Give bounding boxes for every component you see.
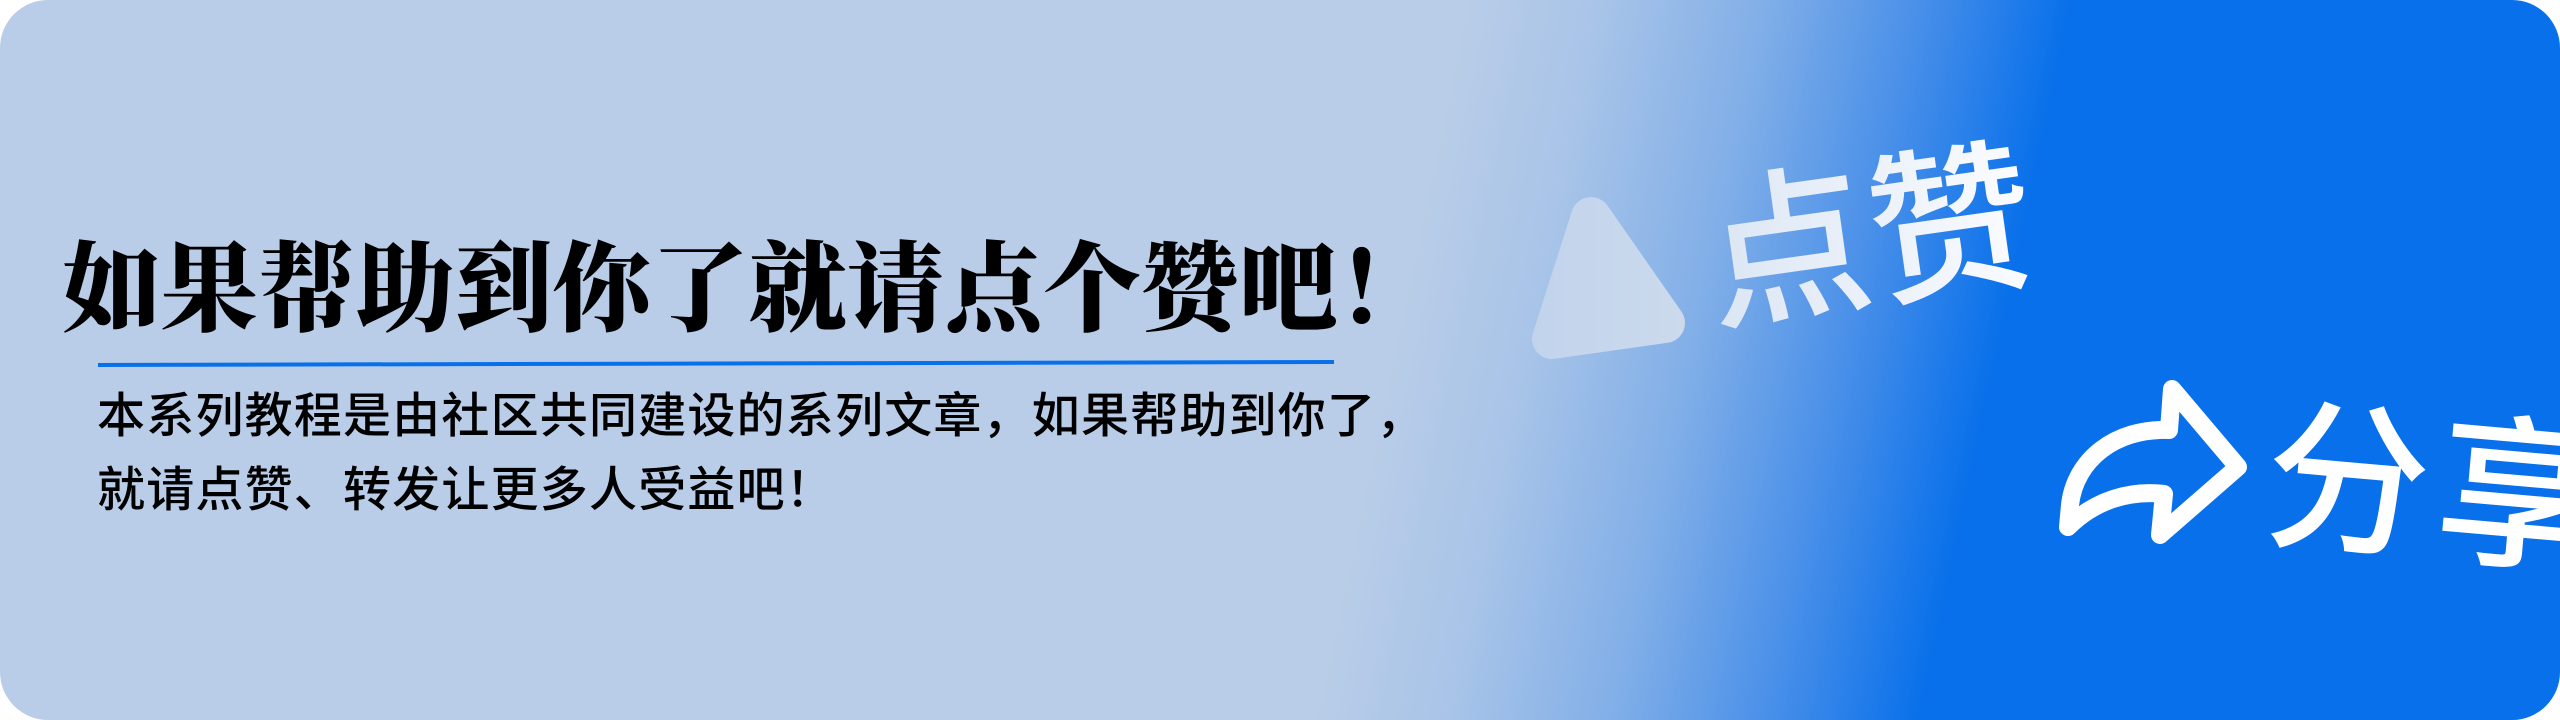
heading underline <box>98 360 1334 367</box>
icon: like triangle <box>1552 217 1665 339</box>
title: 如果帮助到你了就请点个赞吧！ <box>62 237 1435 345</box>
label: like: 点赞 <box>1693 125 2046 353</box>
icon: share arrow <box>2068 389 2238 535</box>
text block: description <box>97 390 1425 517</box>
text block: description: 本系列教程是由社区共同建设的系列文章，如果帮助到你了， <box>97 390 1425 443</box>
text block: description: 就请点赞、转发让更多人受益吧！ <box>97 464 835 517</box>
